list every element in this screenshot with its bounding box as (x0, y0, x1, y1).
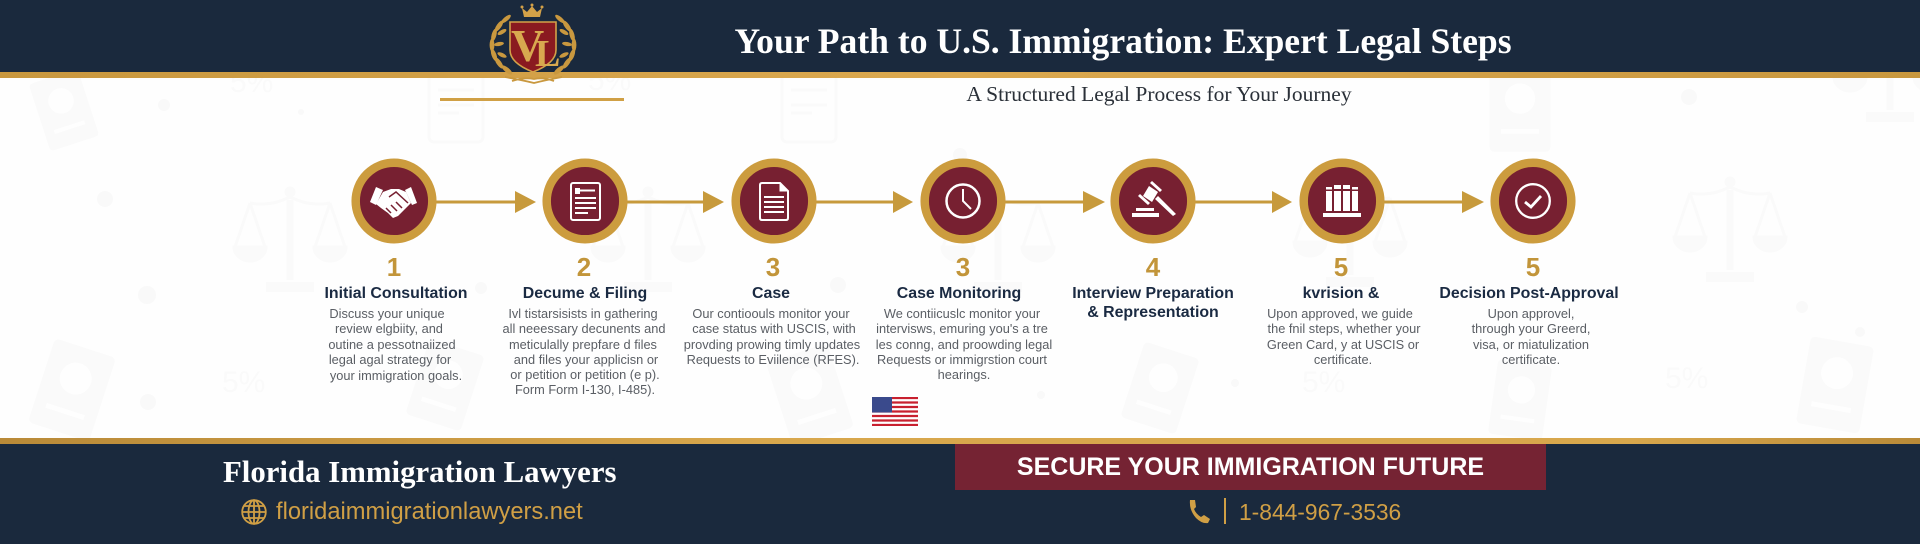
text: Decision Post-Approval (1439, 285, 1619, 302)
monogram: L (535, 33, 560, 75)
process timeline: circles, icons, arrows (351, 158, 1576, 244)
title: Your Path to U.S. Immigration: Expert Legal Steps (734, 21, 1512, 61)
text: your immigration goals. (330, 368, 462, 383)
text: Green Card, y at USCIS or (1267, 337, 1419, 352)
monogram: V (511, 20, 544, 71)
step 7: Decision Post-Approval (1439, 252, 1619, 367)
text: the fnil steps, whether your (1268, 321, 1420, 336)
text: Our contioouls monitor your (692, 306, 850, 321)
text: 2 (577, 252, 591, 282)
step 1: Initial Consultation (324, 252, 468, 383)
text: Case (752, 285, 790, 302)
step 7 icon: check mark in circle (1495, 163, 1571, 239)
text: Upon approvel, (1488, 306, 1574, 321)
text: case status with USCIS, with (692, 321, 856, 336)
text: 3 (766, 252, 780, 282)
step 4 icon: clock (925, 163, 1001, 239)
shield (510, 22, 556, 72)
call to action banner (955, 444, 1546, 490)
logo: laurel shield and crown (490, 4, 576, 84)
step 2: Document and Filing (503, 252, 665, 397)
step 4: Case Monitoring (876, 252, 1052, 382)
text: Requests to Eviilence (RFES). (687, 352, 859, 367)
arrow 1 (436, 191, 536, 213)
text: meticulally prepfare d files (509, 337, 657, 352)
text: Ivl tistarsisists in gathering (508, 306, 658, 321)
crown (520, 4, 544, 17)
arrow 3 (816, 191, 913, 213)
ribbon under wreath (505, 77, 562, 83)
text: kvrision & (1303, 285, 1379, 302)
text: 1 (387, 252, 401, 282)
text: all neeessary decunents and (503, 321, 665, 336)
background watermark icons: 5% (1665, 362, 1708, 395)
step 6 icon: books on a shelf (1304, 163, 1380, 239)
text: Decume & Filing (523, 285, 647, 302)
header gold rule (0, 72, 1920, 78)
text: through your Greerd, (1472, 321, 1590, 336)
text: hearings. (938, 367, 990, 382)
text: review elgbiity, and (335, 321, 443, 336)
text: 5 (1334, 252, 1348, 282)
background watermark icons: 5% (222, 366, 265, 399)
text: Upon approved, we guide (1267, 306, 1413, 321)
footer gold rule (0, 438, 1920, 444)
footer firm name: Florida Immigration Lawyers (223, 455, 616, 489)
text: legal agal strategy for (329, 352, 451, 367)
phone number: 1-844-967-3536 (1239, 499, 1401, 525)
text: & Representation (1087, 304, 1219, 321)
text: Requests or immigrstion court (877, 352, 1047, 367)
text: provding prowing timly updates (684, 337, 860, 352)
step 3 icon: document with folded corner (736, 163, 812, 239)
text: Discuss your unique (329, 306, 445, 321)
text: certificate. (1502, 352, 1560, 367)
call to action banner: SECURE YOUR IMMIGRATION FUTURE (1017, 453, 1484, 481)
logo underline (440, 98, 624, 101)
phone divider (1224, 498, 1226, 524)
step 5: Interview Preparation and Representation (1072, 252, 1234, 321)
text: certificate. (1314, 352, 1372, 367)
text: or petition or petition (e p). (510, 367, 660, 382)
text: Initial Consultation (324, 285, 468, 302)
footer band (0, 444, 1920, 544)
step 2 icon: form document (547, 163, 623, 239)
arrow 6 (1384, 191, 1484, 213)
text: We contiicuslc monitor your (884, 306, 1040, 321)
text: and files your applicisn or (514, 352, 658, 367)
arrow 4 (1005, 191, 1105, 213)
step 3: Case (684, 252, 860, 367)
arrow 5 (1195, 191, 1292, 213)
text: 3 (956, 252, 970, 282)
laurel wreath (490, 13, 576, 76)
text: Interview Preparation (1072, 285, 1234, 302)
text: Form Form I-130, I-485). (515, 382, 655, 397)
icon: globe (241, 499, 267, 525)
background watermark icons (0, 78, 1920, 438)
icon: phone (1190, 500, 1210, 524)
text: 4 (1146, 252, 1160, 282)
background watermark icons: 5% (1302, 366, 1345, 399)
text: intervisws, emuring you's a tre (876, 321, 1048, 336)
step 1 icon: handshake (356, 163, 432, 239)
text: 5 (1526, 252, 1540, 282)
text: visa, or miatulization (1473, 337, 1589, 352)
text: Case Monitoring (897, 285, 1021, 302)
step 6: Revision (1267, 252, 1420, 367)
step 5 icon: gavel (1115, 163, 1191, 239)
header band (0, 0, 1920, 72)
icon: US flag (872, 397, 918, 426)
text: outine a pessotnaiized (328, 337, 456, 352)
text: les conng, and proowding legal (876, 337, 1052, 352)
subtitle: A Structured Legal Process for Your Journey (966, 82, 1352, 106)
arrow 2 (627, 191, 724, 213)
footer website: floridaimmigrationlawyers.net (276, 499, 583, 525)
monogram (511, 20, 560, 75)
